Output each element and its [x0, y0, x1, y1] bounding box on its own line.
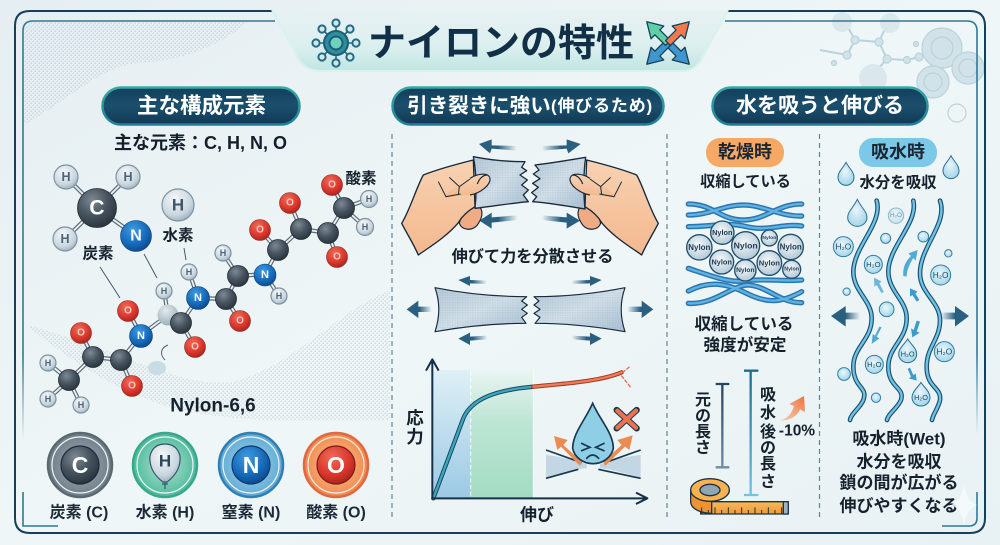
length comparison	[691, 370, 805, 514]
vertical label: original length: の	[695, 408, 711, 424]
left fabric	[473, 157, 528, 208]
H2O labels: H₂O	[901, 349, 915, 358]
icon: tape measure	[691, 479, 788, 514]
legend: oxygen: O	[327, 452, 345, 478]
icon: orange rising arrow	[779, 396, 805, 421]
atom letters	[45, 170, 372, 410]
text: absorbing moisture: 水分を吸収	[860, 174, 937, 192]
atom letters: H	[61, 170, 71, 184]
nylon bead labels: Nylon	[762, 235, 776, 241]
left stretched fabric	[435, 288, 527, 332]
atom letters: H	[366, 194, 372, 204]
atom letters: O	[124, 306, 132, 316]
H2O labels: H₂O	[867, 360, 882, 369]
decorative molecule network: top right	[820, 12, 984, 122]
decorative mesh: top-left	[24, 22, 248, 125]
text: contracted, stable strength: 強度が安定	[704, 334, 786, 354]
heading pill: main elements: 主な構成元素	[137, 94, 266, 118]
dry nylon fibre diagram	[687, 204, 803, 303]
axes	[426, 359, 647, 504]
small flow arrows	[872, 250, 920, 381]
icon: torn fabric with water drop	[546, 403, 641, 478]
legend: hydrogen: H	[159, 452, 171, 470]
H2O labels: H₂O	[890, 212, 902, 219]
stretched fabric diagram	[407, 276, 653, 345]
arrows around hands	[479, 139, 581, 229]
heading pill: stretches on absorbing water	[712, 88, 928, 124]
legend: hydrogen: 水素 (H)	[136, 504, 194, 522]
vertical label: original length: 元	[695, 392, 711, 408]
atom letters: N	[194, 292, 202, 304]
text: wet state explanation: 吸水時(Wet)	[852, 430, 946, 448]
heading pill: tear strength	[392, 88, 664, 124]
text: wet state explanation: 鎖の間が広がる	[840, 472, 958, 492]
legend: carbon	[48, 433, 112, 522]
vertical label: length after absorption: 水	[760, 404, 776, 422]
vertical label: length after absorption: 長	[760, 454, 776, 472]
upper fibres	[688, 204, 802, 228]
legend: oxygen: 酸素 (O)	[306, 504, 366, 522]
oxygen atoms	[70, 174, 348, 396]
legend: carbon: C	[72, 452, 88, 478]
atom letters: N	[130, 228, 142, 244]
legend: nitrogen: N	[243, 452, 259, 478]
heading pill: main elements	[102, 88, 300, 124]
badge: wet	[859, 138, 937, 167]
badge: wet: 吸水時	[871, 142, 925, 162]
badge: dry: 乾燥時	[718, 142, 772, 162]
H2O labels	[835, 212, 953, 402]
text: contracted: 収縮している	[700, 172, 791, 190]
arrows around stretched fabric	[407, 276, 653, 345]
large side arrows	[831, 306, 969, 327]
axis label: elongation: 伸び	[520, 506, 554, 524]
nylon bead labels: Nylon	[711, 257, 732, 266]
icon: molecule hub	[312, 19, 360, 67]
vertical label: length after absorption: 後	[760, 422, 776, 440]
legend: carbon: 炭素 (C)	[50, 504, 108, 522]
wavy chains	[850, 201, 942, 420]
text: wet state explanation: 伸びやすくなる	[840, 496, 958, 516]
bar: original length	[716, 383, 729, 467]
label: carbon: 炭素	[82, 244, 114, 262]
text: main elements list: 主な元素：C, H, N, O	[114, 133, 287, 153]
leader lines	[100, 248, 186, 298]
right hand	[578, 160, 658, 255]
axis label: stress: 応	[406, 408, 424, 428]
heading pill: tear strength: 引き裂きに強い	[407, 94, 551, 118]
atom letters: O	[77, 328, 85, 338]
atom letters: O	[256, 224, 264, 236]
left thumb	[438, 174, 490, 197]
vertical label: length after absorption: 吸	[760, 386, 776, 404]
atom letters: C	[89, 196, 105, 220]
text: stretch and disperse force: 伸びて力を分散させる	[452, 248, 613, 266]
nylon bead labels: Nylon	[784, 266, 799, 272]
nitrogen atoms	[120, 220, 276, 348]
dashed dividers	[392, 134, 820, 520]
icon: crossing arrows	[640, 15, 696, 71]
heading pill: stretches on absorbing water: 水を吸うと伸びる	[736, 94, 904, 118]
legend: nitrogen	[219, 433, 283, 522]
stress-strain chart	[426, 359, 647, 504]
left hand	[402, 160, 482, 255]
atom letters: H	[220, 248, 226, 258]
legend: hydrogen	[133, 433, 197, 522]
nylon bead labels: Nylon	[688, 243, 711, 252]
nylon bead labels	[688, 228, 802, 274]
atom letters: H	[186, 267, 192, 277]
atom letters: O	[333, 252, 341, 262]
text: contracted, stable strength: 収縮している	[694, 314, 794, 334]
nylon bead labels: Nylon	[712, 228, 733, 237]
nylon beads	[687, 221, 803, 281]
bubbles	[833, 208, 954, 402]
bonds	[48, 177, 369, 405]
label: oxygen: 酸素	[345, 170, 377, 188]
legend: oxygen	[304, 433, 368, 522]
nylon bead labels: Nylon	[759, 258, 780, 267]
text: wet state explanation: 水分を吸収	[856, 452, 942, 472]
vertical label: original length: さ	[695, 438, 711, 456]
elastic region	[433, 370, 471, 498]
right fabric	[532, 157, 586, 209]
atom letters: N	[137, 330, 145, 342]
atom letters: H	[362, 222, 368, 232]
hydrogen atoms	[40, 165, 378, 413]
nylon bead labels: Nylon	[736, 267, 755, 274]
plastic region	[471, 370, 533, 498]
carbon atoms	[58, 188, 354, 390]
text: contracted, stable strength	[694, 314, 794, 354]
decorative mesh: bottom wave	[26, 290, 390, 421]
decorative sparkle	[951, 484, 977, 526]
text: wet state explanation	[840, 430, 958, 516]
atom letters: H	[123, 170, 133, 184]
atom letters: N	[261, 269, 269, 281]
atom letters: H	[172, 196, 184, 214]
atom letters: O	[191, 342, 199, 352]
right thumb	[570, 174, 622, 197]
H2O labels: H₂O	[835, 242, 852, 252]
H2O labels: H₂O	[936, 347, 953, 357]
atom letters: O	[236, 316, 244, 326]
atom letters: O	[328, 180, 336, 190]
vertical label: original length: 長	[695, 422, 711, 440]
atom letters: H	[78, 400, 84, 410]
curve	[433, 366, 631, 498]
hands tearing fabric	[402, 139, 658, 255]
title: ナイロンの特性	[368, 23, 634, 65]
H2O labels: H₂O	[914, 393, 928, 402]
right stretched fabric	[534, 288, 625, 332]
lower fibres	[688, 268, 802, 303]
axis label: stress: 力	[406, 427, 424, 447]
heading pill: tear strength: (伸びるため)	[551, 96, 653, 116]
bar: length after absorption	[744, 370, 758, 495]
atom letters: H	[45, 394, 51, 404]
atom letters: H	[276, 291, 282, 301]
vertical label: length after absorption: の	[760, 440, 776, 456]
smudge mark	[148, 345, 168, 375]
title banner	[272, 10, 728, 71]
atom letters: O	[286, 198, 294, 208]
molecule diagram	[40, 165, 378, 413]
atom letters: H	[161, 286, 167, 296]
water drops	[838, 156, 959, 406]
label: hydrogen: 水素	[162, 226, 194, 244]
label: Nylon-6,6: Nylon-6,6	[170, 396, 256, 416]
atom letters: O	[128, 380, 136, 392]
H2O labels: H₂O	[866, 260, 881, 269]
nylon bead labels: Nylon	[734, 241, 758, 251]
label: minus ten percent: -10%	[779, 422, 815, 440]
atom letters: H	[60, 232, 70, 246]
H2O labels: H₂O	[933, 270, 949, 280]
wet fibre diagram	[831, 156, 969, 420]
legend: nitrogen: 窒素 (N)	[222, 504, 280, 522]
atom letters: H	[45, 358, 51, 368]
nylon bead labels: Nylon	[780, 242, 802, 251]
element legend	[48, 433, 368, 522]
badge: dry	[706, 138, 784, 167]
vertical label: length after absorption: さ	[760, 472, 776, 490]
